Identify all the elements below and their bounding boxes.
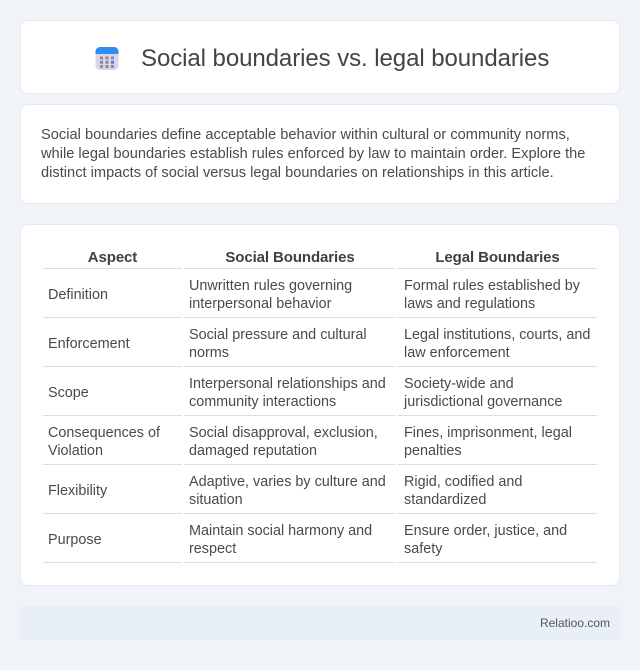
row: Consequences of Violation: Consequences of xyxy=(48,425,160,441)
row: Scope: community interactions xyxy=(189,394,336,410)
row: Definition: Unwritten rules governing xyxy=(189,278,352,294)
row: Enforcement: norms xyxy=(189,345,229,361)
row: Scope xyxy=(43,376,597,416)
row: Consequences of Violation: penalties xyxy=(404,443,462,459)
row: Definition: Formal rules established by xyxy=(404,278,580,294)
row: Consequences of Violation: Violation xyxy=(48,443,103,459)
row: Scope: jurisdictional governance xyxy=(404,394,562,410)
row: Consequences of Violation xyxy=(43,425,597,465)
row: Purpose xyxy=(43,523,597,563)
row: Consequences of Violation: Fines, imprisonment, legal xyxy=(404,425,572,441)
row: Definition xyxy=(43,278,597,318)
row: Flexibility: standardized xyxy=(404,492,486,508)
row: Flexibility: Adaptive, varies by culture and xyxy=(189,474,386,490)
intro text: distinct impacts of social versus legal boundaries on relationships in this article. xyxy=(41,165,554,181)
column header: Aspect: Aspect xyxy=(88,249,137,266)
row: Flexibility: Flexibility xyxy=(48,483,107,499)
row: Flexibility xyxy=(43,474,597,514)
icon: calendar xyxy=(96,47,118,70)
row: Purpose: Ensure order, justice, and xyxy=(404,523,567,539)
row: Consequences of Violation: damaged reputation xyxy=(189,443,317,459)
row: Enforcement xyxy=(43,327,597,367)
row: Definition: Definition xyxy=(48,287,108,303)
row: Purpose: safety xyxy=(404,541,442,557)
row: Enforcement: Enforcement xyxy=(48,336,130,352)
row: Flexibility: situation xyxy=(189,492,243,508)
intro text: Social boundaries define acceptable behavior within cultural or community norms, xyxy=(41,127,570,143)
row: Consequences of Violation: Social disapproval, exclusion, xyxy=(189,425,378,441)
title: Social boundaries vs. legal boundaries xyxy=(141,45,549,72)
row: Flexibility: Rigid, codified and xyxy=(404,474,522,490)
row: Enforcement: Social pressure and cultural xyxy=(189,327,367,343)
row: Purpose: respect xyxy=(189,541,236,557)
row: Enforcement: Legal institutions, courts, and xyxy=(404,327,590,343)
footer credit: Relatioo.com xyxy=(540,616,610,630)
row: Scope: Interpersonal relationships and xyxy=(189,376,386,392)
row: Definition: interpersonal behavior xyxy=(189,296,331,312)
intro card xyxy=(20,104,620,204)
intro text xyxy=(41,127,585,181)
row: Purpose: Maintain social harmony and xyxy=(189,523,372,539)
header card xyxy=(20,20,620,94)
intro text: while legal boundaries establish rules enforced by law to maintain order. Explore the xyxy=(41,146,585,162)
row: Purpose: Purpose xyxy=(48,532,102,548)
footer bar xyxy=(20,606,620,640)
row: Scope: Scope xyxy=(48,385,89,401)
column header: Social Boundaries: Social Boundaries xyxy=(225,249,355,266)
column header: Legal Boundaries: Legal Boundaries xyxy=(435,249,560,266)
comparison table xyxy=(43,249,597,563)
row: Definition: laws and regulations xyxy=(404,296,535,312)
row: Scope: Society-wide and xyxy=(404,376,514,392)
row: Enforcement: law enforcement xyxy=(404,345,510,361)
table card xyxy=(20,224,620,586)
